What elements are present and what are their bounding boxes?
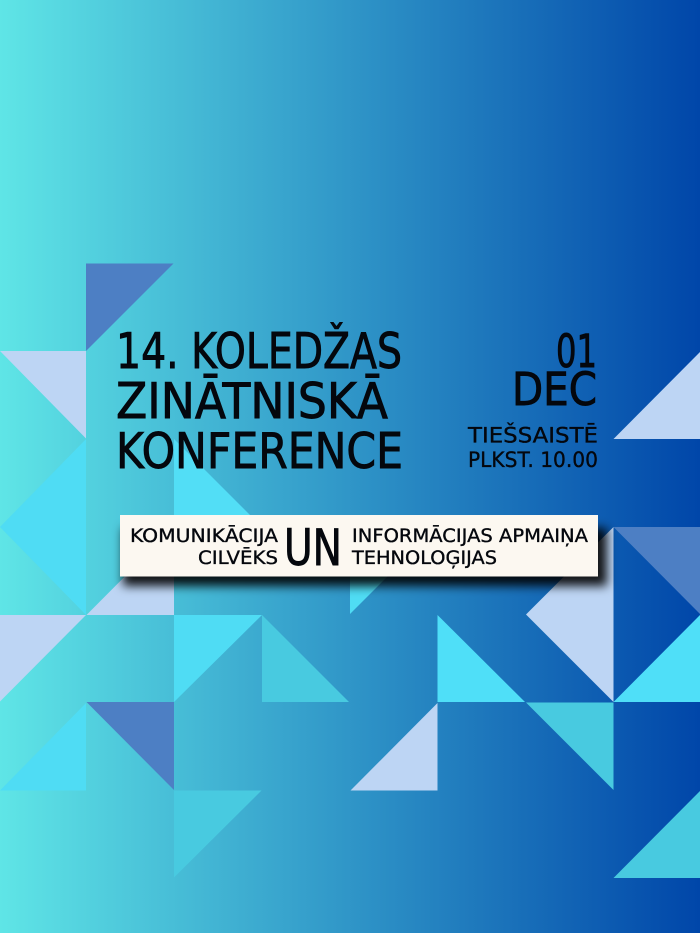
banner shadow (123, 528, 607, 586)
date: DEC (512, 363, 597, 416)
theme banner: INFORMĀCIJAS APMAIŅA (352, 525, 588, 547)
theme banner: CILVĒKS (198, 547, 278, 569)
title (116, 321, 403, 480)
title: ZINĀTNISKĀ (116, 373, 388, 430)
theme banner: TEHNOLOĢIJAS (351, 548, 497, 569)
venue and time: PLKST. 10.00 (468, 448, 598, 473)
triangle pattern (0, 264, 700, 878)
theme banner (120, 515, 598, 577)
venue and time: TIEŠSAISTĒ (467, 422, 598, 448)
date: 01 (556, 325, 597, 378)
theme banner: KOMUNIKĀCIJA (130, 525, 278, 547)
theme banner: UN (284, 519, 342, 577)
title: 14. KOLEDŽAS (116, 321, 402, 380)
venue and time (467, 422, 598, 473)
title: KONFERENCE (116, 423, 403, 480)
date (512, 325, 597, 416)
